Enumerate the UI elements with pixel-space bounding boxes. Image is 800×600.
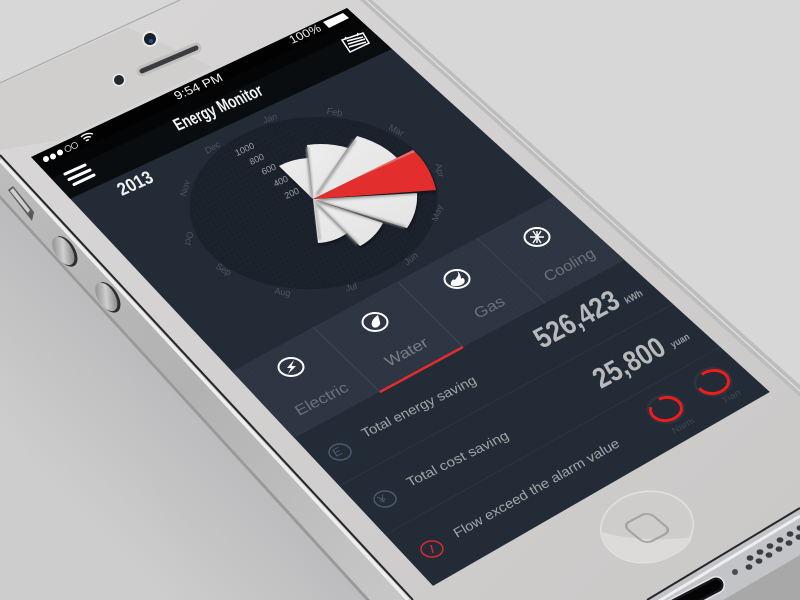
glass reflection xyxy=(0,27,213,150)
row: total cost saving: yuan xyxy=(669,332,692,350)
left edge white band xyxy=(0,160,408,600)
tab: Water: Water xyxy=(382,334,432,370)
row: alarm: Flow exceed the alarm value xyxy=(451,436,623,541)
chart disc xyxy=(190,117,438,289)
month labels xyxy=(178,106,446,298)
upper face band xyxy=(0,0,180,83)
top glass seam xyxy=(0,0,180,83)
month labels: Nov xyxy=(178,179,192,197)
month labels: Aug xyxy=(274,286,291,298)
month labels: Jun xyxy=(402,250,420,267)
tab: Cooling xyxy=(524,228,599,285)
status: signal dots xyxy=(43,142,78,162)
month labels: Mar xyxy=(387,122,406,138)
wedges xyxy=(279,136,436,246)
bottom edge white band xyxy=(654,516,800,600)
wedge: Jan xyxy=(279,158,313,199)
tab: Electric xyxy=(278,358,352,419)
background top right xyxy=(360,0,800,397)
active tab indicator xyxy=(380,347,463,392)
header bar xyxy=(31,8,392,199)
status bar xyxy=(31,8,358,168)
row: total cost saving: Total cost saving xyxy=(404,429,512,490)
scale labels: 800 xyxy=(248,152,266,167)
volume down button xyxy=(91,277,125,317)
tab bar xyxy=(232,196,625,438)
row: total cost saving: ¥ xyxy=(374,492,389,507)
left metal side xyxy=(0,155,413,600)
icon: menu xyxy=(65,165,94,184)
month labels: Jul xyxy=(344,281,358,293)
status: battery percent: 100% xyxy=(286,22,324,46)
volume up button xyxy=(48,231,82,271)
wedge: Jul xyxy=(313,199,347,243)
month labels: Oct xyxy=(183,231,195,247)
microphone dot xyxy=(732,569,738,575)
front camera xyxy=(142,31,158,47)
month labels: Sep xyxy=(214,261,233,278)
year: 2013 xyxy=(113,168,157,200)
wedge: Mar xyxy=(313,136,397,199)
scale labels: 600 xyxy=(260,162,278,177)
charging port xyxy=(672,585,716,600)
scale labels: 400 xyxy=(272,174,290,189)
row: total energy saving: kWh xyxy=(623,289,645,306)
tab: Water xyxy=(362,312,427,366)
row dividers xyxy=(339,304,720,535)
bottom metal side xyxy=(647,508,800,600)
icon: calendar xyxy=(342,33,369,52)
row: total energy saving: E xyxy=(330,445,345,459)
row: total energy saving: 526,423 xyxy=(527,284,626,354)
title: Energy Monitor xyxy=(170,81,267,135)
gauge: Tian xyxy=(695,368,743,406)
gauge: Nami: Nami xyxy=(670,416,696,436)
wedge: Apr highlighted xyxy=(313,150,436,199)
tab dividers xyxy=(313,238,545,392)
gauge: Nami xyxy=(648,396,696,436)
tab: Gas xyxy=(444,269,505,317)
scale labels xyxy=(236,142,299,199)
tab: Gas: Gas xyxy=(471,293,508,322)
month labels: Feb xyxy=(326,106,343,118)
status: wifi xyxy=(81,133,93,141)
gauge: Tian: Tian xyxy=(720,388,743,406)
row: total energy saving: Total energy saving xyxy=(359,373,480,441)
mute switch xyxy=(8,186,34,221)
wedge: Feb xyxy=(307,144,348,199)
month labels: Dec xyxy=(203,139,222,156)
month labels: Apr xyxy=(434,162,446,178)
status: battery xyxy=(323,13,349,28)
row: total cost saving xyxy=(374,331,692,507)
row: total cost saving: 25,800 xyxy=(586,331,672,394)
row: total energy saving xyxy=(329,284,645,460)
scale labels: 200 xyxy=(283,186,301,201)
bottom seam xyxy=(647,508,800,600)
speaker holes xyxy=(746,525,800,570)
left seam xyxy=(0,155,413,600)
scale labels: 1000 xyxy=(234,141,256,158)
shadow area under phone at lower right xyxy=(723,555,800,600)
tab: Cooling: Cooling xyxy=(541,245,599,285)
tab: Electric: Electric xyxy=(292,379,352,419)
light sensor xyxy=(112,74,126,86)
wedge: Jun xyxy=(313,199,383,246)
earpiece speaker xyxy=(142,48,196,71)
row: alarm xyxy=(421,368,743,557)
home button xyxy=(596,485,698,569)
chart: radial energy chart xyxy=(178,106,446,298)
month labels: May xyxy=(430,203,445,223)
status: time: 9:54 PM xyxy=(171,71,225,102)
month labels: Jan xyxy=(261,111,279,125)
wedge: May xyxy=(313,193,417,228)
right metal edge xyxy=(360,0,800,397)
